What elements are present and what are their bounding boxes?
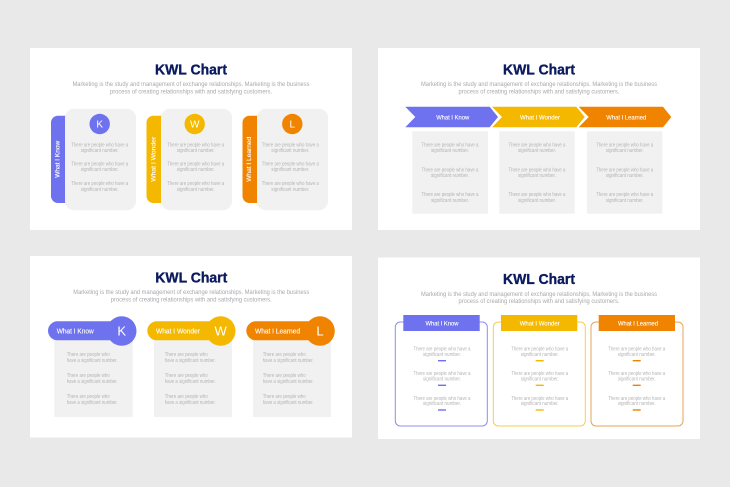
body text: significant number.: [518, 198, 556, 204]
box: [587, 131, 662, 214]
tab: What I Wonder: What I Wonder: [150, 136, 158, 182]
body text: There are people who: [67, 373, 110, 379]
body text: There are people who have a: [596, 142, 653, 148]
body text: There are people who: [165, 394, 208, 400]
body text: significant number.: [518, 148, 556, 154]
body text: There are people who have a: [508, 168, 566, 174]
column: What I Learned: [246, 316, 335, 417]
panel: KWL chart with outlined cards: [378, 258, 700, 439]
header: What I Learned: What I Learned: [618, 320, 658, 327]
column: What I Know: [51, 109, 136, 210]
pill: What I Learned: What I Learned: [255, 328, 300, 336]
panel: KWL chart with arrows: [378, 48, 700, 230]
body text: There are people who have a: [167, 142, 224, 148]
pill: What I Wonder: W: [215, 324, 228, 339]
body text: significant number.: [423, 401, 461, 407]
outlined card: [591, 322, 683, 426]
body text: There are people who: [67, 394, 110, 400]
body text: There are people who have a: [71, 162, 128, 168]
subtitle: process of creating relationships with and satisfying customers.: [111, 296, 272, 304]
body text: There are people who have a: [422, 168, 479, 174]
body text: significant number.: [606, 198, 644, 204]
body text: significant number.: [521, 401, 559, 407]
body text: There are people who have a: [71, 142, 128, 148]
card: [65, 109, 136, 210]
body text: significant number.: [431, 198, 469, 204]
body text: significant number.: [81, 187, 119, 193]
column: What I Know: [405, 107, 498, 214]
body text: There are people who: [165, 352, 208, 358]
subtitle: Marketing is the study and management of exchange relationships. Marketing is the business: [421, 81, 657, 88]
body text: There are people who: [263, 394, 306, 400]
body text: There are people who have a: [511, 396, 568, 402]
body text: significant number.: [431, 173, 469, 179]
title: KWL Chart: [155, 269, 227, 286]
pill: What I Learned: L: [316, 324, 324, 339]
pill: What I Know: [48, 316, 136, 346]
body text: have a significant number.: [67, 400, 118, 406]
card: [257, 109, 328, 210]
body text: There are people who have a: [262, 181, 319, 187]
subtitle: Marketing is the study and management of exchange relationships. Marketing is the business: [73, 289, 309, 296]
body text: significant number.: [431, 148, 469, 154]
body text: There are people who have a: [167, 162, 224, 168]
icon: W circle: W: [190, 120, 200, 131]
body text: There are people who have a: [508, 192, 566, 198]
body text: There are people who have a: [414, 396, 471, 402]
title: KWL Chart: [155, 62, 227, 79]
column: What I Know: [395, 315, 487, 426]
accent dashes: [438, 360, 446, 411]
tab: What I Know: What I Know: [55, 141, 62, 178]
body text: There are people who have a: [414, 371, 471, 377]
accent dashes: [633, 360, 641, 411]
body text: have a significant number.: [67, 379, 118, 385]
body text: significant number.: [618, 376, 656, 382]
body text: There are people who have a: [71, 181, 128, 187]
body text: have a significant number.: [263, 358, 314, 364]
outlined card: [395, 322, 487, 426]
pill: What I Wonder: [147, 316, 236, 346]
column: What I Wonder: [147, 316, 236, 417]
body text: There are people who have a: [596, 192, 653, 198]
pill: What I Wonder: What I Wonder: [156, 328, 201, 336]
pill: What I Learned: [246, 316, 335, 346]
body text: There are people who have a: [511, 371, 568, 377]
body text: There are people who have a: [422, 192, 479, 198]
body text: There are people who have a: [596, 168, 653, 174]
body text: There are people who: [67, 352, 110, 358]
box: [154, 335, 232, 417]
box: [499, 131, 575, 214]
box: [412, 131, 488, 214]
body text: significant number.: [271, 167, 309, 173]
body text: There are people who have a: [414, 346, 471, 352]
body text: There are people who: [263, 352, 306, 358]
header: What I Wonder: What I Wonder: [520, 320, 560, 327]
body text: significant number.: [518, 173, 556, 179]
tab: What I Learned: What I Learned: [246, 136, 253, 182]
body text: There are people who have a: [422, 142, 479, 148]
body text: significant number.: [177, 167, 215, 173]
subtitle: Marketing is the study and management of exchange relationships. Marketing is the business: [421, 291, 657, 298]
body text: There are people who have a: [608, 396, 665, 402]
column: What I Learned: [591, 315, 683, 426]
body text: significant number.: [81, 148, 119, 154]
icon: L circle: L: [290, 120, 296, 131]
arrow: What I Wonder: What I Wonder: [520, 114, 561, 121]
box: [54, 335, 133, 417]
body text: significant number.: [177, 187, 215, 193]
subtitle: process of creating relationships with and satisfying customers.: [458, 88, 620, 96]
body text: There are people who have a: [167, 181, 224, 187]
body text: significant number.: [271, 148, 309, 154]
body text: significant number.: [423, 376, 461, 382]
column: What I Learned: [579, 107, 671, 214]
body text: significant number.: [606, 173, 644, 179]
panel: KWL chart with side tabs: [30, 48, 352, 230]
arrow: What I Learned: What I Learned: [606, 114, 647, 121]
body text: There are people who: [263, 373, 306, 379]
body text: significant number.: [423, 352, 461, 358]
body text: There are people who have a: [511, 346, 568, 352]
body text: have a significant number.: [165, 379, 216, 385]
body text: There are people who: [165, 373, 208, 379]
pill: What I Know: What I Know: [57, 328, 95, 336]
subtitle: Marketing is the study and management of exchange relationships. Marketing is the business: [72, 81, 310, 88]
body text: significant number.: [618, 352, 656, 358]
title: KWL Chart: [503, 62, 575, 79]
body text: There are people who have a: [262, 162, 319, 168]
subtitle: process of creating relationships with and satisfying customers.: [110, 88, 272, 96]
card: [161, 109, 232, 210]
body text: There are people who have a: [262, 142, 319, 148]
box: [253, 335, 331, 417]
outlined card: [493, 322, 585, 426]
body text: have a significant number.: [263, 379, 314, 385]
body text: significant number.: [606, 148, 644, 154]
body text: significant number.: [81, 167, 119, 173]
column: What I Know: [48, 316, 136, 417]
pill: What I Know: K: [117, 324, 126, 339]
icon: K circle: K: [96, 120, 103, 131]
body text: have a significant number.: [165, 358, 216, 364]
header: What I Know: What I Know: [426, 320, 459, 327]
subtitle: process of creating relationships with and satisfying customers.: [458, 298, 620, 305]
accent dashes: [536, 360, 544, 411]
body text: have a significant number.: [263, 400, 314, 406]
body text: There are people who have a: [608, 346, 665, 352]
body text: significant number.: [521, 352, 559, 358]
body text: have a significant number.: [67, 358, 118, 364]
column: What I Wonder: [493, 315, 585, 426]
panel: KWL chart with pills: [30, 256, 352, 438]
body text: There are people who have a: [608, 371, 665, 377]
body text: significant number.: [177, 148, 215, 154]
arrow: What I Know: What I Know: [436, 114, 469, 121]
column: What I Learned: [242, 109, 328, 210]
body text: significant number.: [521, 376, 559, 382]
body text: significant number.: [618, 401, 656, 407]
body text: There are people who have a: [508, 142, 566, 148]
column: What I Wonder: [492, 107, 585, 214]
body text: significant number.: [271, 187, 309, 193]
title: KWL Chart: [503, 271, 575, 288]
column: What I Wonder: [146, 109, 232, 210]
body text: have a significant number.: [165, 400, 216, 406]
